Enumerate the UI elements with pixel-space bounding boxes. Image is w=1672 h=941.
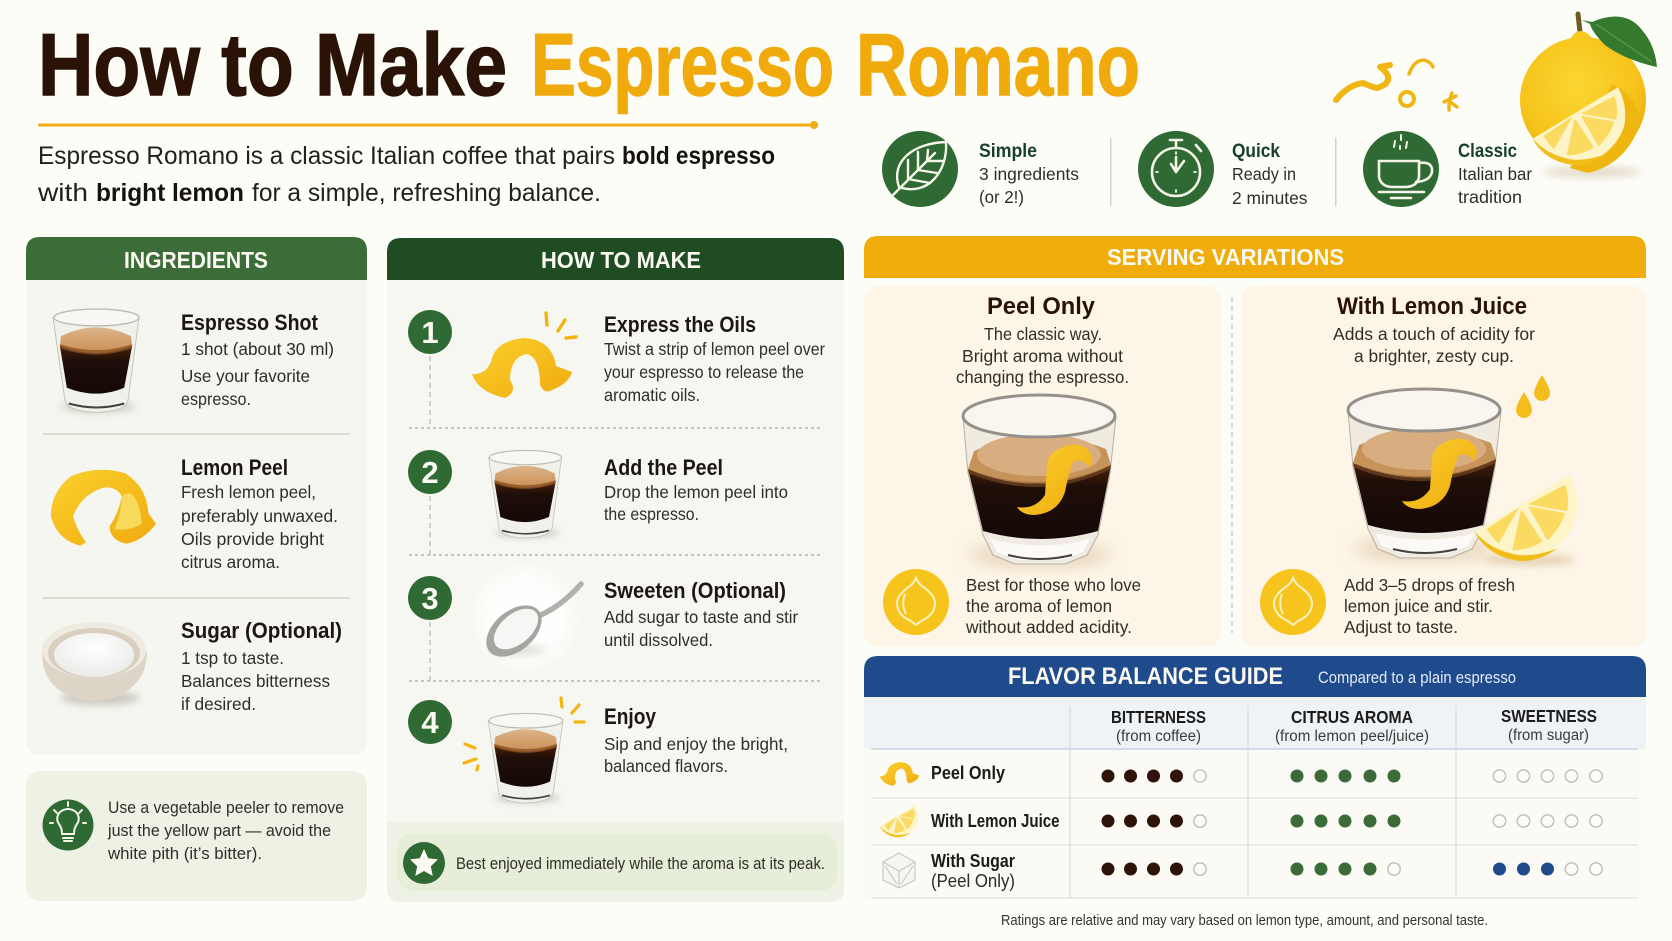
- ingredient: espresso shot: Use your favorite: [181, 366, 310, 386]
- icon: espresso glass with sparkle rays: [464, 698, 584, 803]
- step 2: [408, 450, 788, 538]
- whole lemon with leaf and wedge: [1520, 14, 1657, 178]
- step 3: 3: [421, 581, 439, 616]
- step 4: Sip and enjoy the bright,: [604, 734, 788, 754]
- espresso glass with lemon peel and wedge: [1348, 389, 1577, 566]
- intro text: with: [37, 179, 88, 207]
- icon: lemon badge: [883, 569, 949, 635]
- column header: citrus aroma: [1275, 707, 1429, 745]
- step 3: Sweeten (Optional): [604, 578, 786, 603]
- column header: bitterness: BITTERNESS: [1111, 707, 1206, 727]
- callout: best enjoyed: Best enjoyed immediately while the aroma is at its peak.: [456, 855, 825, 873]
- ingredient: sugar: if desired.: [181, 694, 256, 714]
- variation card: peel only: [864, 286, 1221, 647]
- variation card: peel only: changing the espresso.: [956, 367, 1129, 387]
- ingredient: lemon peel: Fresh lemon peel,: [181, 482, 316, 502]
- column header: sweetness: (from sugar): [1508, 727, 1589, 744]
- step 1: 1: [421, 315, 439, 350]
- serving variations header: SERVING VARIATIONS: [1107, 244, 1344, 270]
- flavor guide header: [864, 656, 1646, 697]
- icon: lemon badge: [1260, 569, 1326, 635]
- column header: citrus aroma: CITRUS AROMA: [1291, 707, 1413, 727]
- row: with sugar: (Peel Only): [931, 871, 1015, 891]
- panel: how to make: [387, 238, 844, 902]
- column header: bitterness: [1111, 707, 1206, 745]
- callout: best enjoyed: [387, 822, 844, 902]
- variation card: with lemon juice: With Lemon Juice: [1337, 293, 1527, 320]
- step 3: Add sugar to taste and stir: [604, 607, 798, 627]
- intro text: [37, 142, 775, 207]
- ingredient: lemon peel: Oils provide bright: [181, 529, 324, 549]
- variation card: peel only: The classic way.: [984, 324, 1102, 344]
- flavor guide header: FLAVOR BALANCE GUIDE: [1008, 663, 1283, 690]
- row: with lemon juice: With Lemon Juice: [931, 811, 1060, 831]
- column header: citrus aroma: (from lemon peel/juice): [1275, 728, 1429, 745]
- tip callout: white pith (it’s bitter).: [107, 845, 262, 863]
- row: peel only: Peel Only: [931, 763, 1005, 783]
- icon: twisted lemon peel: [472, 313, 576, 398]
- step 4: 4: [421, 705, 439, 740]
- ingredient: lemon peel: Lemon Peel: [181, 455, 288, 480]
- how to make header: HOW TO MAKE: [541, 247, 701, 273]
- step 2: the espresso.: [604, 504, 699, 524]
- variation card: peel only: without added acidity.: [965, 617, 1132, 637]
- title: Espresso: [531, 15, 834, 114]
- row: with sugar: With Sugar: [931, 851, 1015, 871]
- feature: quick: [1138, 131, 1308, 208]
- panel: ingredients: [26, 237, 367, 755]
- tip callout: just the yellow part — avoid the: [107, 822, 331, 840]
- tip callout: Use a vegetable peeler to remove: [108, 799, 344, 817]
- espresso glass with lemon peel: [963, 395, 1116, 564]
- ingredient: espresso shot: 1 shot (about 30 ml): [181, 339, 334, 359]
- step 4: balanced flavors.: [604, 756, 728, 776]
- title: Romano: [856, 15, 1140, 114]
- intro text: bright lemon: [96, 179, 244, 207]
- row: peel only: [880, 762, 1602, 786]
- ingredient: sugar: Sugar (Optional): [181, 618, 342, 643]
- step 1: your espresso to release the: [604, 362, 804, 382]
- intro text: Espresso Romano is a classic Italian coffee that pairs: [38, 142, 615, 170]
- feature: simple: [882, 131, 1079, 207]
- column header: bitterness: (from coffee): [1116, 728, 1201, 745]
- step 3: [408, 562, 798, 674]
- feature: classic: Italian bar: [1458, 164, 1532, 184]
- variation card: with lemon juice: Add 3–5 drops of fresh: [1344, 575, 1515, 595]
- tip callout: [26, 771, 367, 901]
- column header: sweetness: [1501, 706, 1597, 744]
- variation card: peel only: Bright aroma without: [962, 346, 1123, 366]
- feature: classic: [1363, 131, 1532, 207]
- ingredient: lemon peel: preferably unwaxed.: [181, 506, 338, 526]
- step 2: Drop the lemon peel into: [604, 482, 788, 502]
- column header: sweetness: SWEETNESS: [1501, 706, 1597, 726]
- icon: star: [403, 842, 445, 884]
- ingredients header: [26, 237, 367, 280]
- step 4: Enjoy: [604, 704, 656, 729]
- feature: quick: Quick: [1232, 140, 1280, 162]
- ingredient: sugar: [42, 618, 342, 714]
- icon: light bulb: [42, 800, 94, 850]
- ingredient: espresso shot: espresso.: [181, 389, 251, 409]
- feature: simple: Simple: [979, 140, 1037, 162]
- how to make header: [387, 238, 844, 280]
- title underline: [38, 121, 818, 129]
- ingredient: lemon peel: [51, 455, 338, 572]
- variation card: with lemon juice: Adds a touch of acidity for: [1333, 324, 1535, 344]
- variation card: with lemon juice: Adjust to taste.: [1344, 617, 1458, 637]
- variation card: peel only: Best for those who love: [966, 575, 1141, 595]
- footnote: Ratings are relative and may vary based on lemon type, amount, and personal taste.: [1001, 913, 1488, 929]
- ingredient: espresso shot: Espresso Shot: [181, 310, 318, 335]
- ingredient: sugar: Balances bitterness: [181, 671, 330, 691]
- step 1: Express the Oils: [604, 312, 756, 337]
- ingredient: lemon peel: citrus aroma.: [181, 552, 280, 572]
- feature: quick: 2 minutes: [1232, 188, 1308, 208]
- feature: simple: (or 2!): [979, 187, 1024, 207]
- ingredient: espresso shot: [53, 309, 334, 412]
- variation card: with lemon juice: [1241, 286, 1646, 647]
- lemon peel curls decoration: [1336, 60, 1457, 110]
- icon: lemon juice drops: [1516, 375, 1550, 418]
- feature: simple: 3 ingredients: [979, 164, 1079, 184]
- title: [38, 15, 1140, 114]
- step 4: [408, 698, 788, 803]
- variation card: with lemon juice: lemon juice and stir.: [1344, 596, 1493, 616]
- serving variations header: [864, 236, 1646, 278]
- feature: classic: Classic: [1458, 140, 1517, 162]
- step 1: [408, 310, 825, 405]
- variation card: peel only: the aroma of lemon: [966, 596, 1112, 616]
- panel: serving variations: [864, 236, 1646, 647]
- icon: espresso glass: [489, 450, 562, 538]
- ingredient: sugar: 1 tsp to taste.: [181, 648, 284, 668]
- step 2: 2: [421, 455, 439, 490]
- row: with sugar: [883, 851, 1602, 891]
- icon: sugar cube: [883, 853, 915, 888]
- flavor guide header: Compared to a plain espresso: [1318, 669, 1516, 687]
- step 3: until dissolved.: [604, 630, 713, 650]
- feature: quick: Ready in: [1232, 164, 1296, 184]
- feature: classic: tradition: [1458, 187, 1522, 207]
- ingredients header: INGREDIENTS: [124, 247, 268, 273]
- intro text: for a simple, refreshing balance.: [252, 179, 601, 207]
- step 1: aromatic oils.: [604, 385, 700, 405]
- variation card: peel only: Peel Only: [987, 293, 1095, 320]
- step 2: Add the Peel: [604, 455, 723, 480]
- panel: flavor balance guide: [864, 656, 1646, 899]
- step 1: Twist a strip of lemon peel over: [604, 339, 825, 359]
- title: How to Make: [38, 15, 507, 114]
- icon: spoon of sugar: [469, 562, 581, 674]
- intro text: bold espresso: [622, 142, 775, 170]
- variation card: with lemon juice: a brighter, zesty cup.: [1354, 346, 1514, 366]
- row: with lemon juice: [880, 805, 1602, 837]
